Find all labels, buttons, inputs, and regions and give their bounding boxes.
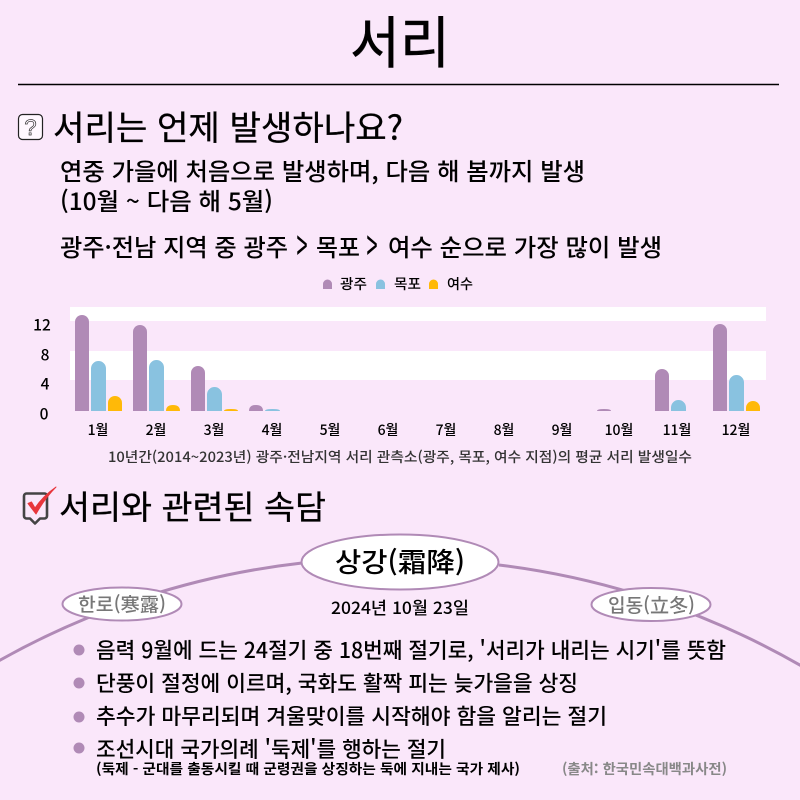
bar chart: average frost days by month [33,307,766,440]
bullet list: Sanggang facts [74,634,726,764]
text block: regional ranking: 광주·전남 지역 중 광주 [60,228,288,263]
bars: Gwangju [75,315,727,411]
x axis labels: 6월 [378,420,398,440]
solar term: Ipdong: 입동(立冬) [608,591,695,618]
x axis labels: 12월 [722,420,750,440]
text block: frost season: (10월 ~ 다음 해 5월) [60,182,273,217]
icon: question mark box [18,114,42,140]
chart legend [323,274,473,294]
text block: regional ranking: > [366,210,378,274]
x axis labels [88,420,750,440]
y axis labels: 4 [41,372,50,394]
footnote: Dokje explanation: (둑제 - 군대를 출동시킬 때 군령권을 상징하는 둑에 지내는 국가 제사) [96,759,520,779]
icon: check speech bubble [24,487,56,524]
heading: when does frost occur: 서리는 언제 발생하나요? [53,101,403,150]
x axis labels: 9월 [552,420,572,440]
heading: frost proverbs: 서리와 관련된 속담 [59,481,326,529]
x axis labels: 5월 [320,420,340,440]
text block: frost season: 연중 가을에 처음으로 발생하며, 다음 해 봄까지 발생 [60,152,585,187]
solar term: Ipdong [592,588,710,621]
text block: regional ranking: 목포 [316,228,360,263]
x axis labels: 1월 [88,420,108,440]
solar term: Sanggang: 상강(霜降) [335,541,465,580]
y axis labels: 0 [40,402,49,424]
x axis labels: 7월 [436,420,456,440]
text block: regional ranking: > [296,210,308,274]
date: 2024년 10월 23일 [331,594,469,619]
source note: (출처: 한국민속대백과사전) [562,759,727,779]
x axis labels: 10월 [605,420,633,440]
chart legend: 광주 [340,274,367,294]
chart caption: 10년간(2014~2023년) 광주·전남지역 서리 관측소(광주, 목포, 여수 지점)의 평균 서리 발생일수 [108,447,692,467]
solar term: Sanggang [302,534,498,590]
bars: Yeosu [108,396,760,411]
bullet list: Sanggang facts: 추수가 마무리되며 겨울맞이를 시작해야 함을 알리는 절기 [96,700,607,731]
solar term: Hallo [62,588,182,620]
chart legend: 목포 [394,274,421,294]
text block: frost season [60,152,585,217]
bullet list: Sanggang facts: 단풍이 절정에 이르며, 국화도 활짝 피는 늦가을을 상징 [96,667,578,698]
solar term: Hallo: 한로(寒露) [78,590,166,617]
bullet list: Sanggang facts: 음력 9월에 드는 24절기 중 18번째 절기로, '서리가 내리는 시기'를 뜻함 [96,634,726,665]
bars: Mokpo [91,360,744,411]
title: 서리 [350,0,450,80]
x axis labels: 4월 [262,420,282,440]
icon: question mark box: ? [24,115,37,140]
text block: regional ranking [60,210,662,274]
y axis labels [33,314,51,424]
text block: regional ranking: 여수 순으로 가장 많이 발생 [388,228,662,263]
x axis labels: 3월 [204,420,224,440]
x axis labels: 8월 [494,420,514,440]
y axis labels: 12 [33,314,51,336]
bullet list: Sanggang facts: 조선시대 국가의례 '둑제'를 행하는 절기 [96,733,446,764]
y axis labels: 8 [41,344,50,366]
timeline arc [0,563,800,668]
x axis labels: 11월 [663,420,691,440]
chart legend: 여수 [447,274,473,294]
x axis labels: 2월 [146,420,166,440]
